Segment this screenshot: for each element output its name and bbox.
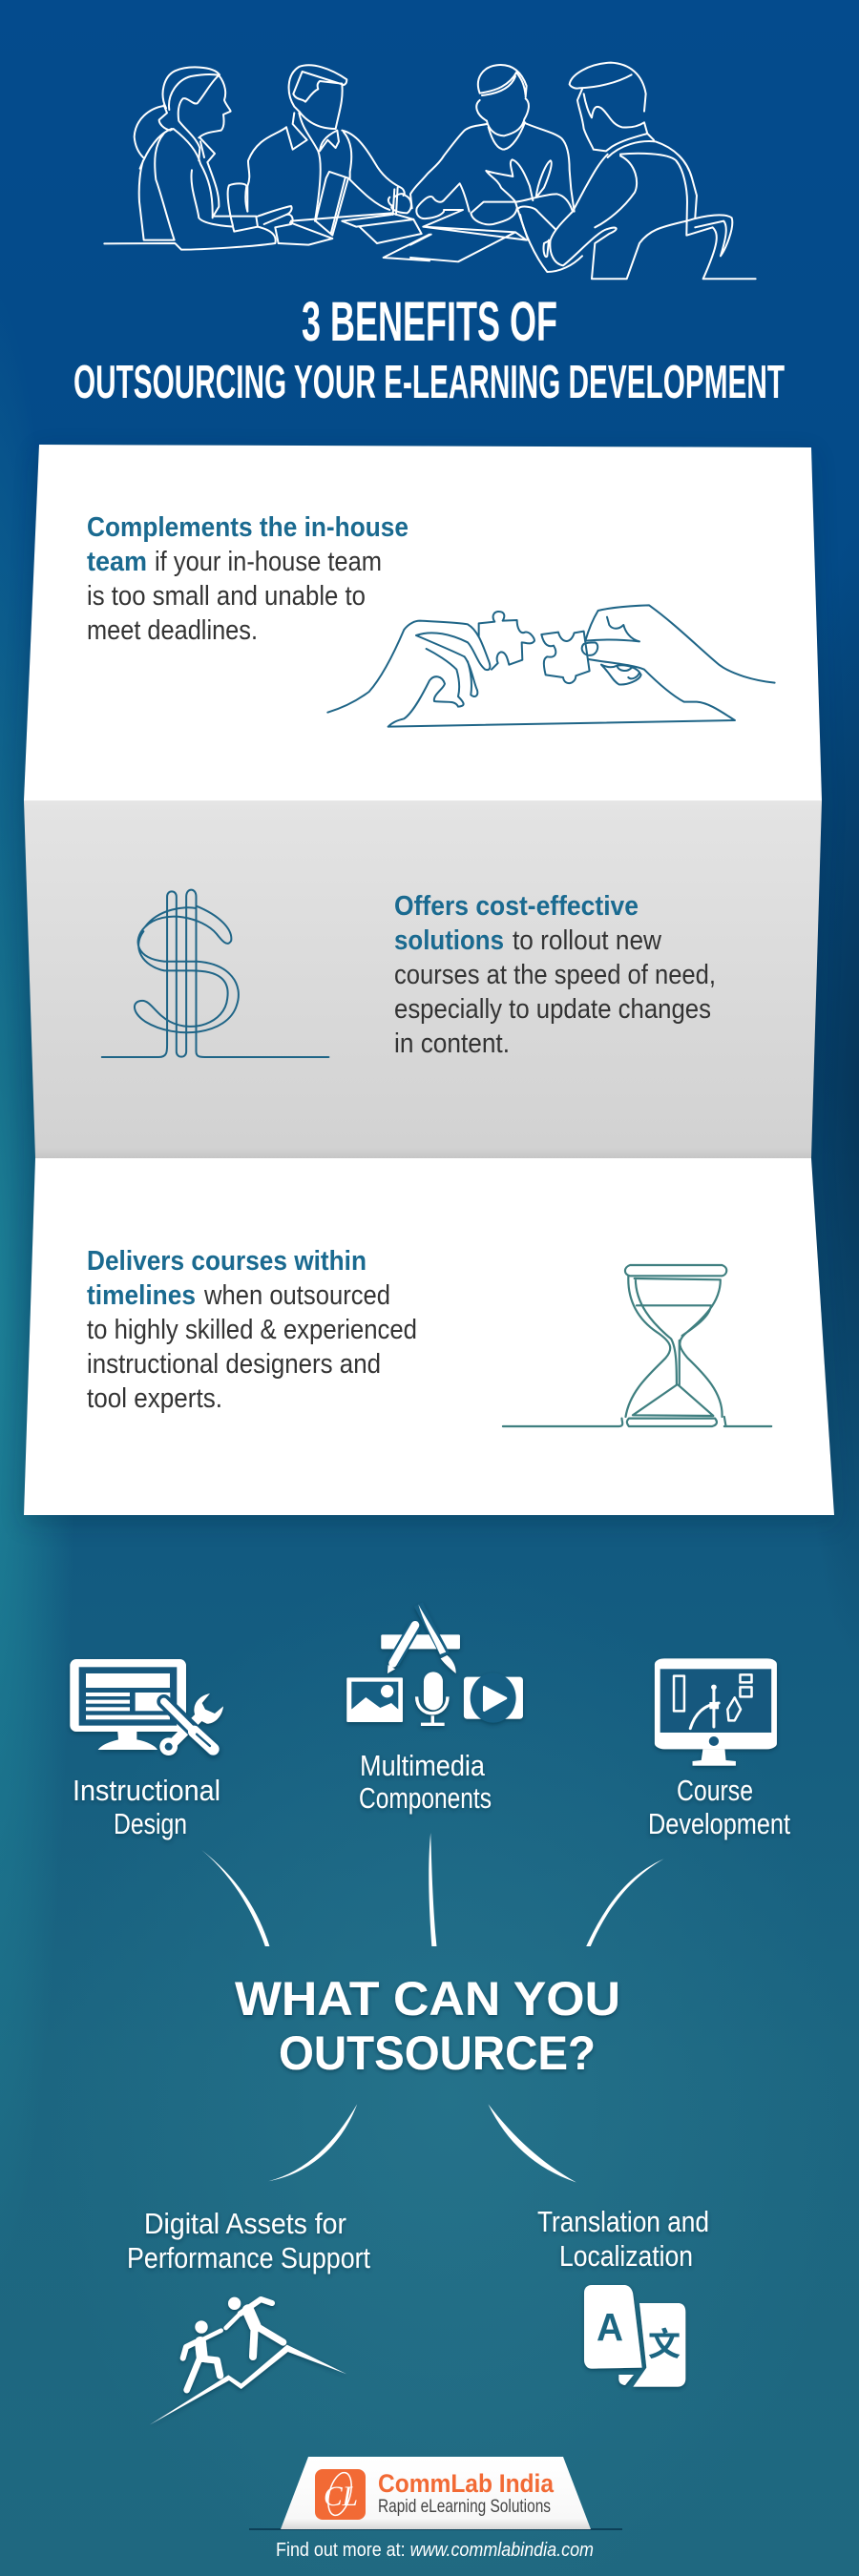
footer link: Find out more at: www.commlabindia.com (276, 2540, 594, 2561)
logo badge (249, 2457, 622, 2529)
label: Localization (559, 2239, 693, 2273)
item: multimedia components (346, 1605, 523, 1815)
label: Course (677, 1774, 753, 1807)
label (127, 2207, 370, 2275)
label: Digital Assets for (144, 2207, 346, 2240)
text block: cost-effective: to rollout new (513, 925, 662, 956)
heading: what can you outsource: OUTSOURCE? (279, 2026, 596, 2080)
text block: timelines: tool experts. (87, 1383, 222, 1414)
title (73, 291, 785, 408)
text block: cost-effective: in content. (394, 1028, 510, 1059)
panel: cost-effective (24, 800, 822, 1158)
text block: timelines (87, 1246, 417, 1414)
text block: cost-effective: Offers cost-effective (394, 891, 639, 922)
text block: timelines: Delivers courses within (87, 1246, 367, 1277)
icon: translate: 文 (648, 2327, 681, 2363)
text block: timelines: instructional designers and (87, 1349, 381, 1380)
label (359, 1749, 492, 1815)
label (73, 1774, 220, 1840)
icon: CL logo (315, 2469, 366, 2520)
text block: complements: team (87, 547, 147, 577)
woman (163, 67, 231, 160)
man three (476, 65, 529, 150)
icon: hands joining puzzle pieces (327, 605, 775, 727)
icon: climbers helping each other (150, 2297, 346, 2425)
text block: cost-effective: solutions (394, 925, 504, 956)
heading: what can you outsource: WHAT CAN YOU (235, 1972, 620, 2025)
panel: timelines (24, 1158, 834, 1515)
item: course development (648, 1658, 790, 1840)
text block: complements: meet deadlines. (87, 615, 258, 646)
label: Translation and (537, 2205, 709, 2238)
text block: complements: Complements the in-house (87, 512, 409, 543)
text block: timelines: when outsourced (203, 1280, 390, 1311)
label: Development (648, 1807, 790, 1840)
label: Components (359, 1781, 492, 1815)
item: instructional design (70, 1659, 223, 1840)
title: 3 BENEFITS OF (302, 291, 557, 353)
label: Performance Support (127, 2241, 370, 2275)
item: translation (537, 2205, 709, 2387)
label (648, 1774, 790, 1840)
label: Design (114, 1807, 187, 1840)
icon: translate: A (597, 2305, 623, 2349)
illustration: four colleagues in a meeting, single line art (104, 63, 756, 279)
text block: cost-effective: courses at the speed of need, (394, 960, 716, 990)
icon: dollar sign line art (102, 890, 328, 1057)
heading: what can you outsource (235, 1972, 620, 2080)
text block: complements (87, 512, 409, 646)
folded paper panel (24, 445, 834, 1515)
icon: hourglass (503, 1265, 771, 1426)
label (537, 2205, 709, 2273)
text block: complements: is too small and unable to (87, 581, 366, 612)
label: Instructional (73, 1774, 220, 1807)
shadow under paper (24, 445, 834, 1515)
arrows: chalk connectors (201, 1833, 664, 2182)
logo badge: Rapid eLearning Solutions (378, 2497, 551, 2517)
text block: timelines: to highly skilled & experienced (87, 1315, 417, 1345)
text block: complements: if your in-house team (155, 547, 382, 577)
panel: complements (24, 445, 822, 800)
icon: design, image, microphone, video (346, 1605, 523, 1724)
label: Multimedia (360, 1749, 486, 1782)
item: digital assets (127, 2207, 370, 2425)
text block: cost-effective (394, 891, 716, 1059)
text block: cost-effective: especially to update changes (394, 994, 711, 1025)
icon: monitor with tools (70, 1659, 223, 1755)
man two (247, 65, 346, 221)
man four (570, 63, 654, 151)
icon: CL logo: CL (324, 2481, 358, 2512)
text block: timelines: timelines (87, 1280, 196, 1311)
icon: monitor with vector tools (655, 1658, 777, 1766)
logo badge: CommLab India (378, 2469, 555, 2498)
icon: translate (584, 2285, 685, 2387)
